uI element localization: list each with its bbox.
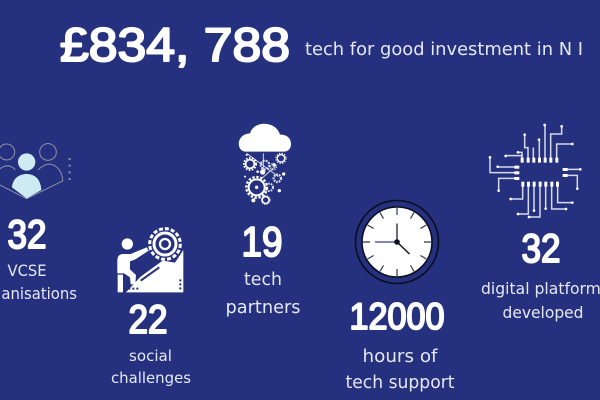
label: digital platforms developed (481, 279, 600, 322)
stat: digital platforms count: 32 (522, 227, 560, 271)
title: investment amount: £834, 788 (60, 18, 290, 71)
title: investment caption: tech for good investment in N I (305, 39, 583, 60)
label: social challenges (111, 347, 191, 387)
label: hours of tech support (346, 347, 455, 393)
stat: social challenges count: 22 (128, 298, 168, 342)
icon: person pushing gear uphill (117, 229, 183, 292)
stat: tech partners count: 19 (242, 218, 282, 265)
icon: circuit chip (489, 124, 582, 218)
stat: VCSE organisations count: 32 (8, 213, 46, 257)
label: social challenges: social (129, 347, 172, 365)
label: VCSE organisations (0, 261, 77, 303)
label: digital platforms developed: developed (502, 303, 584, 322)
stat: hours of tech support count: 12000 (350, 296, 444, 337)
icon: cloud with gears (239, 124, 291, 204)
label: VCSE organisations: VCSE (8, 261, 46, 280)
label: tech partners (226, 269, 300, 318)
icon: people group (0, 144, 70, 199)
label: tech partners: tech (244, 269, 282, 290)
label: tech partners: partners (226, 297, 300, 318)
label: hours of tech support: tech support (346, 373, 455, 393)
icon: clock (356, 200, 438, 284)
label: social challenges: challenges (111, 369, 191, 387)
label: hours of tech support: hours of (362, 347, 438, 367)
